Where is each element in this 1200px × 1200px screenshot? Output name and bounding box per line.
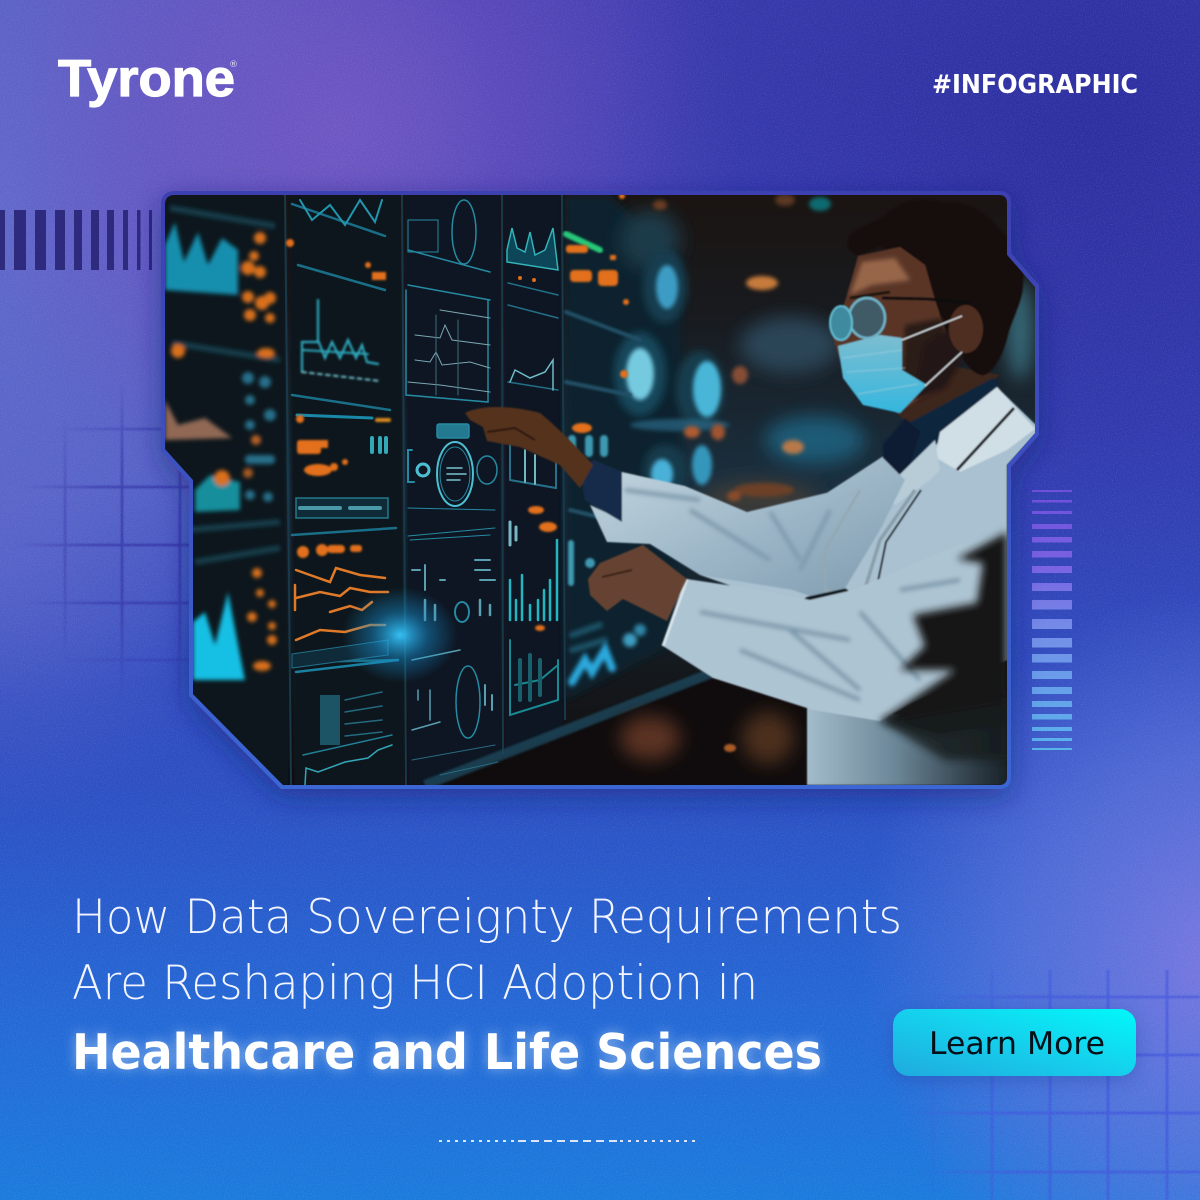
pointing hand xyxy=(465,407,593,488)
ear xyxy=(949,305,983,353)
heading: How Data Sovereignty Requirements xyxy=(72,890,902,945)
upper sleeve xyxy=(590,457,905,605)
room background xyxy=(160,190,1040,790)
heading xyxy=(72,890,902,1081)
logo: Tyrone: ® xyxy=(229,60,238,70)
column 3 gauges xyxy=(406,200,498,775)
doctor xyxy=(465,199,1040,785)
decorative vertical bars xyxy=(0,210,152,270)
sleeve shadow xyxy=(880,532,1007,735)
tag: #INFOGRAPHIC: #INFOGRAPHIC xyxy=(932,70,1138,100)
logo: Tyrone: Tyrone xyxy=(58,50,235,108)
neck xyxy=(895,367,1000,423)
mask xyxy=(838,335,927,413)
hair xyxy=(847,199,1023,375)
coat lower panel xyxy=(807,690,1007,785)
dotted divider xyxy=(439,1140,700,1142)
lower hand xyxy=(588,545,687,621)
floor and screen base xyxy=(422,671,806,785)
lab coat chest xyxy=(700,387,1040,610)
screen columns xyxy=(165,195,563,785)
decorative horizontal stripes xyxy=(1032,490,1072,750)
cuff xyxy=(580,460,622,522)
lower sleeve xyxy=(663,530,1007,721)
shirt and collar xyxy=(882,378,1001,465)
photo: doctor at data wall xyxy=(160,190,1040,790)
button: Learn More xyxy=(893,1009,1136,1080)
heading: Are Reshaping HCI Adoption in xyxy=(72,956,758,1011)
glasses xyxy=(882,298,970,303)
column 4 and 5 charts xyxy=(507,193,646,715)
face xyxy=(833,247,950,408)
cyan light flare xyxy=(342,587,458,683)
blurred left charts xyxy=(165,208,280,680)
column 2 charts xyxy=(286,200,398,785)
coat lapel xyxy=(935,387,1035,472)
room bokeh xyxy=(614,194,1034,520)
heading: Healthcare and Life Sciences xyxy=(72,1024,822,1081)
stethoscope xyxy=(808,490,921,606)
photo frame xyxy=(161,191,1039,789)
button: Learn More: Learn More xyxy=(929,1026,1105,1062)
